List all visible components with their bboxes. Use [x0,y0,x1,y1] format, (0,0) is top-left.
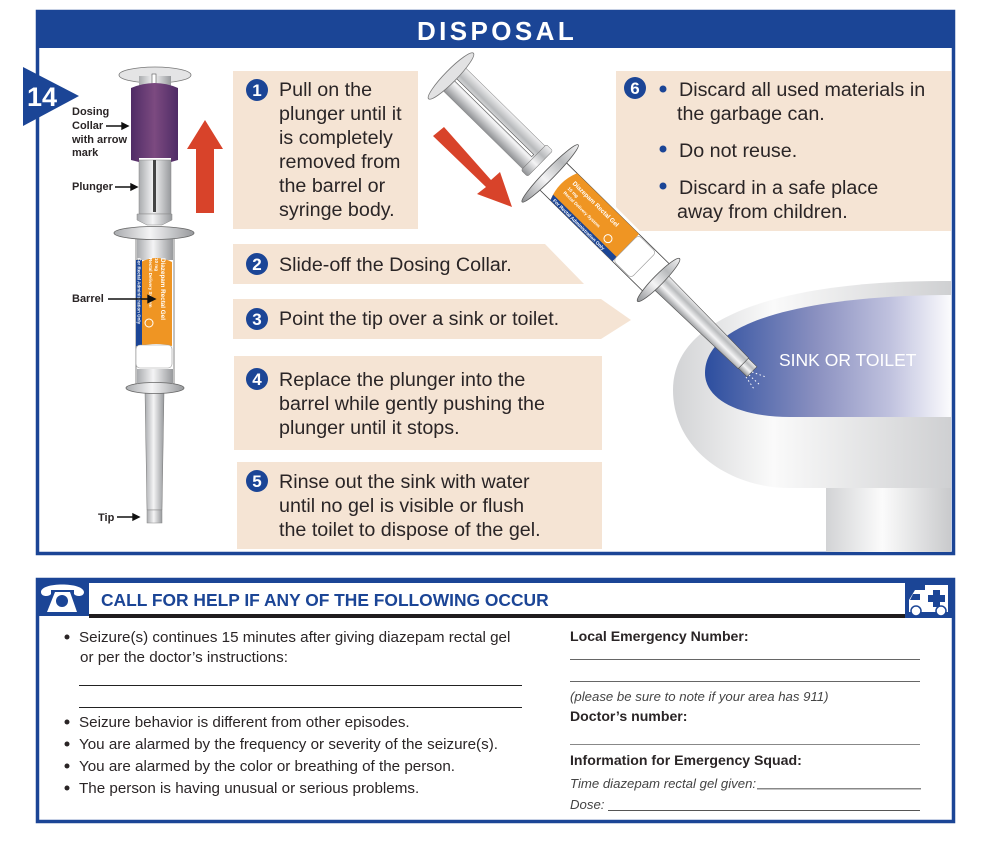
step 2: 2 [252,255,262,274]
step 1: is completely [279,127,393,149]
step 4: 4 [252,370,262,389]
step 1: Pull on the [279,79,372,101]
vertical syringe: 10 mg [154,258,159,271]
symptoms list: You are alarmed by the frequency or severity of the seizure(s). [79,736,498,753]
diagonal syringe: For Rectal Administration Only [551,198,606,252]
vertical syringe: Diazepam Rectal Gel [159,258,166,320]
step 5: until no gel is visible or flush [279,495,524,517]
step 5: Rinse out the sink with water [279,471,530,493]
step 6: Discard in a safe place [679,177,878,199]
call for help header: CALL FOR HELP IF ANY OF THE FOLLOWING OCCUR [101,590,549,610]
emergency information: Doctor’s number: [570,708,687,724]
syringe labels: Barrel [72,293,104,305]
step 6: the garbage can. [677,103,825,125]
icon: ambulance [905,578,955,618]
symptoms list: or per the doctor’s instructions: [80,649,288,666]
symptoms list [64,629,522,797]
emergency information: Dose: [570,797,605,812]
syringe labels: Dosing [72,106,109,118]
icon: red arrow up [187,120,223,213]
diagonal syringe: Diazepam Rectal Gel [571,180,620,229]
step 6: 6 [630,79,640,98]
symptoms list: The person is having unusual or serious problems. [79,780,419,797]
step 4 [234,356,602,450]
symptoms list: Seizure behavior is different from other episodes. [79,714,410,731]
diagonal syringe [419,43,780,400]
step 2 [233,244,584,284]
syringe labels: with arrow [71,134,127,146]
symptoms list: Seizure(s) continues 15 minutes after giving diazepam rectal gel [79,629,510,646]
step 1: syringe body. [279,199,395,221]
emergency information: Information for Emergency Squad: [570,752,802,768]
syringe labels: Plunger [72,181,114,193]
heading band: DISPOSAL [417,16,577,46]
spray drops [746,372,766,389]
icon: red arrow diagonal [433,127,512,207]
step 1: 1 [252,81,262,100]
call for help header [36,578,955,618]
symptoms list: You are alarmed by the color or breathing of the person. [79,758,455,775]
step 6: away from children. [677,201,848,223]
step 1: removed from [279,151,400,173]
vertical syringe: Rectal Delivery System [148,258,153,308]
syringe labels: mark [72,147,99,159]
step 5: the toilet to dispose of the gel. [279,519,541,541]
step 2: Slide-off the Dosing Collar. [279,254,512,276]
step number 14 [23,67,79,126]
vertical syringe [114,67,194,523]
step 5: 5 [252,472,262,491]
emergency information [570,628,921,812]
sink illustration: SINK OR TOILET [779,350,917,370]
emergency information: (please be sure to note if your area has 911) [570,689,829,704]
step 4: plunger until it stops. [279,417,460,439]
step 6: Discard all used materials in [679,79,925,101]
syringe labels [71,106,155,524]
panel: disposal [23,10,955,554]
step 4: barrel while gently pushing the [279,393,545,415]
step 1 [233,71,418,229]
vertical syringe: For Rectal Administration Only [136,258,142,325]
step 4: Replace the plunger into the [279,369,525,391]
emergency information: Local Emergency Number: [570,628,749,644]
step 6: Do not reuse. [679,140,797,162]
step 3: 3 [252,310,262,329]
syringe labels: Collar [72,120,104,132]
heading band [36,10,955,48]
step number 14: 14 [27,82,57,112]
step 5 [237,462,602,549]
step 6 [616,71,951,231]
step 3 [233,299,631,339]
step 3: Point the tip over a sink or toilet. [279,308,559,330]
emergency information: Time diazepam rectal gel given: [570,776,756,791]
icon: telephone [36,578,89,616]
step 1: plunger until it [279,103,402,125]
diagonal syringe: Rectal Delivery System [562,190,601,229]
panel: call for help [36,578,955,822]
diagonal syringe: 10 mg [567,186,580,199]
step 1: the barrel or [279,175,386,197]
syringe labels: Tip [98,512,115,524]
dosing collar [131,83,178,162]
sink illustration [673,281,951,552]
